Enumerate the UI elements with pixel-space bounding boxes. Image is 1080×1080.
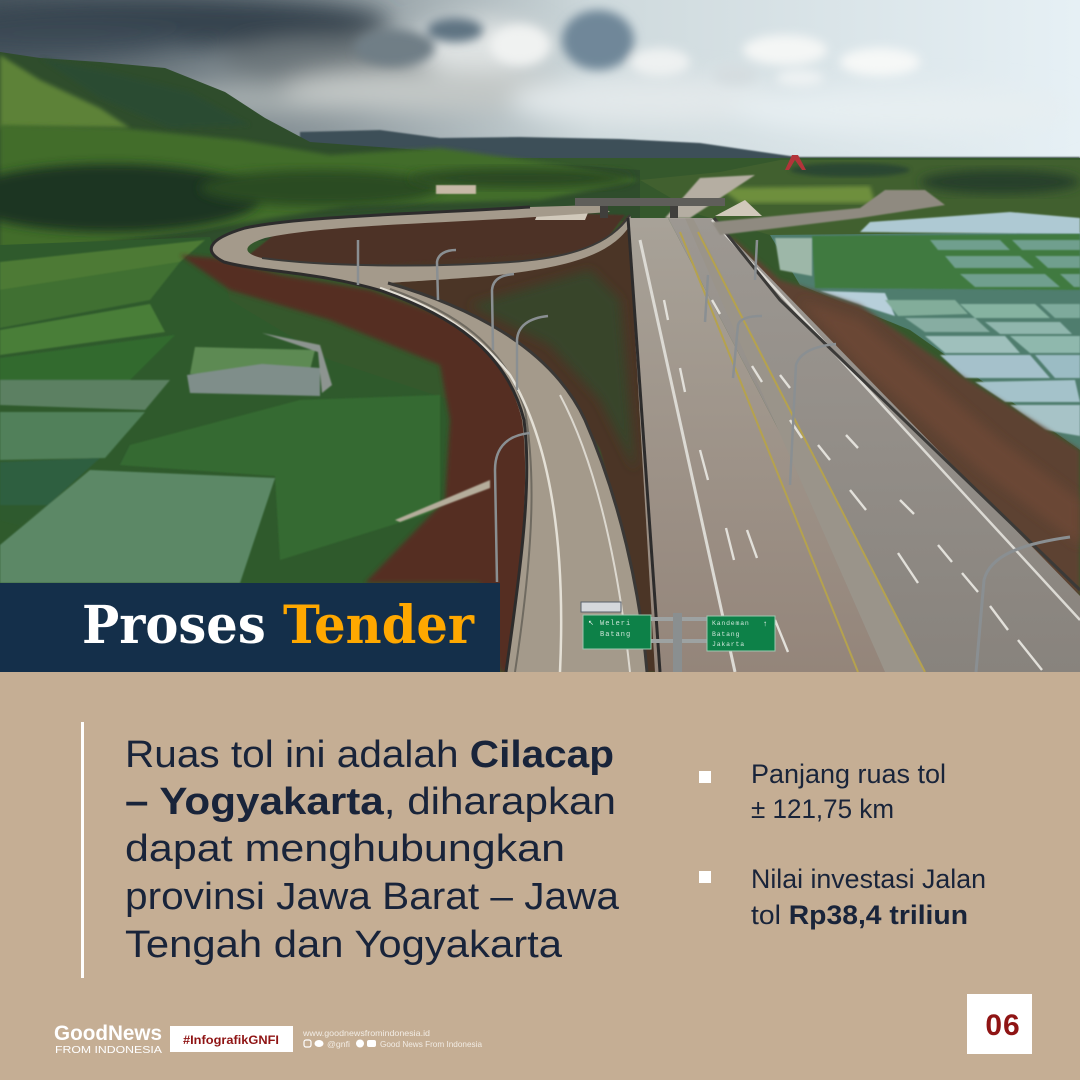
main paragraph with vertical rule: dapat menghubungkan xyxy=(125,828,565,870)
bullet: investment value xyxy=(699,864,986,930)
main paragraph with vertical rule xyxy=(81,722,620,978)
footer logo: GoodNews from Indonesia xyxy=(54,1022,162,1056)
soil embankment right xyxy=(730,235,1080,600)
footer social links: www.goodnewsfromindonesia.id xyxy=(302,1028,430,1038)
hashtag badge: #InfografikGNFI xyxy=(183,1033,279,1047)
photo: toll road interchange aerial view xyxy=(0,0,1080,672)
footer logo: GoodNews from Indonesia: FROM INDONESIA xyxy=(55,1044,162,1056)
sign: Kandeman Batang Jakarta: ↑ xyxy=(763,619,767,628)
bullet: road length xyxy=(699,759,946,824)
main paragraph with vertical rule: – Yogyakarta , diharapkan xyxy=(125,781,616,823)
infield inside the ramp xyxy=(240,200,762,672)
icon: instagram xyxy=(304,1040,311,1047)
sign: Kandeman Batang Jakarta: Kandeman xyxy=(712,620,750,627)
sign: Kandeman Batang Jakarta: Batang xyxy=(712,631,740,638)
icon: twitter xyxy=(314,1040,324,1047)
bullet: road length: ± 121,75 km xyxy=(751,794,894,824)
title text: Proses Tender xyxy=(82,595,475,656)
icon: facebook xyxy=(356,1040,364,1048)
bullet: investment value: Nilai investasi Jalan xyxy=(751,864,986,894)
sign: Weleri Batang: Weleri xyxy=(600,620,631,628)
far strip right with trees and red bridge xyxy=(640,155,1080,235)
green hills left xyxy=(0,52,640,255)
curved ramp road xyxy=(211,205,647,672)
right rice paddies xyxy=(770,212,1080,450)
main paragraph with vertical rule: Tengah dan Yogyakarta xyxy=(125,924,563,966)
distant mountains xyxy=(300,130,1080,180)
footer logo: GoodNews from Indonesia: GoodNews xyxy=(54,1022,162,1045)
sign: Weleri Batang: ↖ xyxy=(588,620,594,627)
footer social links xyxy=(302,1028,482,1049)
title banner xyxy=(0,583,500,672)
sign: Kandeman Batang Jakarta xyxy=(707,616,775,651)
lane dashes xyxy=(664,300,1042,670)
ground base xyxy=(0,158,1080,672)
main paragraph with vertical rule: provinsi Jawa Barat – Jawa xyxy=(125,876,620,918)
page number box: 06 xyxy=(985,1009,1021,1042)
bullet: road length: Panjang ruas tol xyxy=(751,759,946,789)
far road and overpass xyxy=(575,175,945,235)
sign: Weleri Batang xyxy=(583,615,651,649)
hashtag badge xyxy=(170,1026,293,1052)
sign: Kandeman Batang Jakarta: Jakarta xyxy=(712,641,745,648)
gantry pole xyxy=(650,617,710,621)
footer social links: Good News From Indonesia xyxy=(380,1039,482,1049)
sky with clouds xyxy=(0,0,1080,175)
left rice fields xyxy=(0,237,480,583)
bottom panel background xyxy=(0,672,1080,1080)
icon: youtube xyxy=(367,1040,376,1047)
sign: Weleri Batang: Batang xyxy=(600,631,631,639)
street lamps xyxy=(358,240,1070,672)
footer social links: @gnfi xyxy=(327,1039,350,1049)
page number box xyxy=(967,994,1032,1054)
road signs xyxy=(581,602,775,672)
main highway xyxy=(628,218,1080,672)
main paragraph with vertical rule: Ruas tol ini adalah Cilacap xyxy=(125,734,614,776)
bullet: investment value: tol Rp38,4 triliun xyxy=(751,900,968,930)
soil embankment left xyxy=(180,255,540,672)
